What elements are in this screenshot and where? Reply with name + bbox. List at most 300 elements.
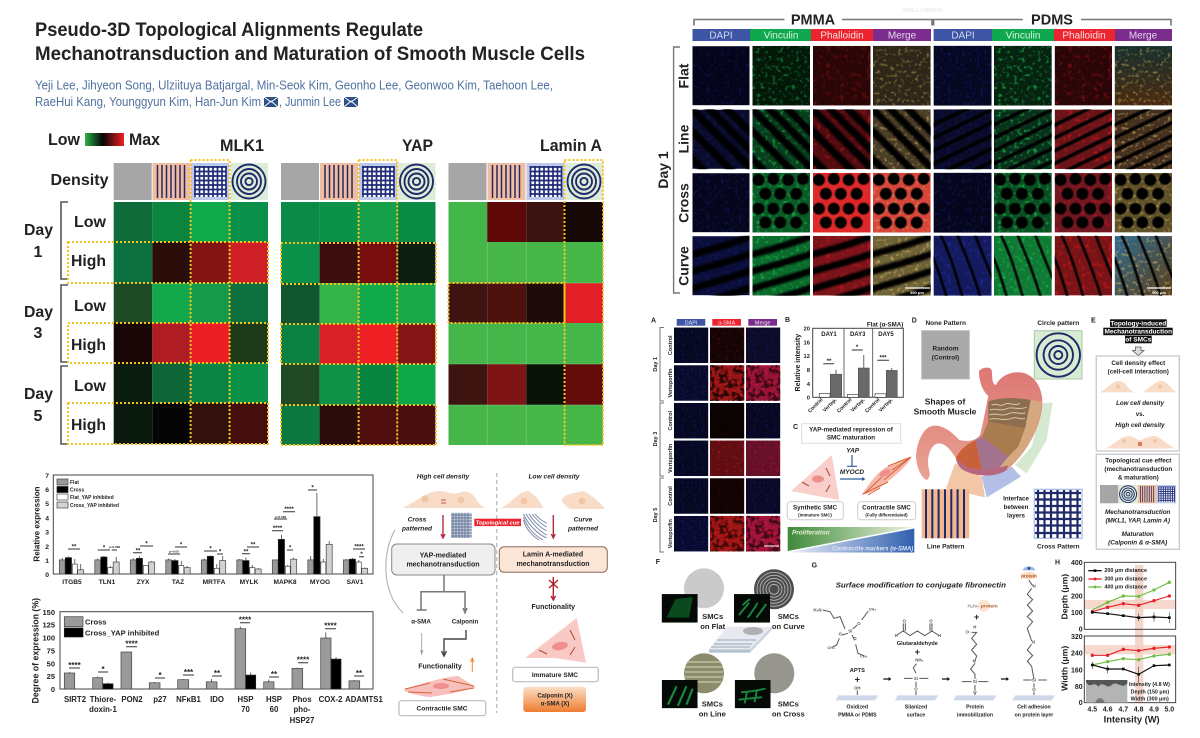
row labels: Low	[74, 214, 107, 231]
step: APTS: O	[853, 636, 857, 641]
box: Lamin A-mediated mechanotransduction: mechanotransduction	[516, 561, 590, 568]
protein labels: SIRT2	[64, 695, 87, 704]
inset caption: Intensity (4.8 W)	[1129, 682, 1170, 688]
gene labels: MYLK	[240, 579, 259, 586]
step: silanized surface: H	[938, 633, 941, 638]
bars: **	[827, 359, 832, 365]
step: APTS: O	[839, 632, 843, 637]
labels: SMCs	[702, 612, 723, 621]
disc: curve	[754, 569, 794, 609]
box: cell density effect	[1096, 356, 1179, 451]
disc: line	[684, 653, 724, 693]
channel headers: Merge	[755, 320, 770, 326]
significance marks: ****	[68, 661, 82, 670]
significance marks: *	[101, 665, 105, 674]
row labels: Day	[24, 304, 53, 321]
black heading: Topology-induced	[1110, 320, 1166, 327]
axis labels: 125	[42, 621, 55, 630]
box: immature SMC: Immature SMC	[532, 672, 578, 679]
significance marks: *	[209, 546, 212, 552]
x labels: Control	[807, 397, 825, 414]
significance marks: p=0.05	[169, 550, 179, 554]
axis labels: 4	[807, 382, 811, 388]
authors: RaeHui Kang, Younggyun Kim, Han-Jun Kim	[35, 95, 261, 109]
icon: contractile cell	[403, 676, 476, 697]
axis labels: 0	[45, 572, 49, 579]
significance marks: ****	[284, 507, 294, 513]
significance marks: ****	[324, 622, 338, 630]
significance marks	[68, 486, 365, 558]
bars	[64, 626, 360, 689]
step: APTS: CH₃	[827, 645, 835, 650]
axis labels: 150	[42, 608, 55, 617]
panel E: topology-induced mechanotransduction	[1091, 317, 1179, 549]
protein labels: pho-	[294, 705, 311, 714]
axis labels: 50	[47, 659, 55, 668]
box: cell density effect: (cell-cell interaction)	[1108, 368, 1169, 375]
significance marks: *	[180, 542, 183, 548]
chart legend: Cross_YAP inhibited	[70, 503, 119, 509]
row labels: Line	[676, 124, 692, 153]
box: topological cue effect	[1096, 454, 1179, 549]
x labels: Vertep.	[878, 397, 895, 414]
protein labels: IDO	[210, 695, 224, 704]
panel B: relative intensity bar chart	[785, 317, 903, 414]
row labels	[24, 172, 109, 434]
box: immature SMC	[513, 667, 598, 682]
panel E: topology-induced mechanotransduction: E	[1091, 317, 1096, 324]
pattern labels: Cross	[408, 516, 427, 524]
panel: Day 1 fluorescence grid: SMCs Patterns	[903, 8, 943, 14]
depth legend	[1088, 568, 1147, 590]
disc: flat	[684, 568, 724, 608]
step: silanized surface: +	[915, 647, 921, 657]
authors: Yeji Lee, Jihyeon Song, Ulziituya Batjargal, Min-Seok Kim, Geonho Lee, Geonwoo Kim, Taehoon Lee,	[35, 78, 553, 92]
axis labels: 75	[47, 646, 55, 656]
panel A: alpha-SMA microscopy: A	[651, 317, 656, 324]
pattern labels: Curve	[574, 516, 593, 524]
axis labels: 8	[807, 368, 811, 374]
panel F: SMCs on patterned substrates: F	[656, 559, 661, 566]
axis labels: 6	[45, 487, 49, 494]
pattern: circle	[1034, 320, 1082, 379]
step: silanized surface: Glutaraldehyde	[897, 641, 938, 647]
depth axis: 400	[1071, 560, 1083, 567]
labels: SMCs	[778, 612, 799, 621]
row labels: Verteporfin	[668, 368, 674, 398]
width axis: 240	[1071, 651, 1083, 658]
row labels: High	[71, 417, 106, 434]
row labels: Verteporfin	[668, 443, 674, 473]
step: APTS: O	[857, 621, 861, 626]
functionality labels: Functionality	[418, 663, 462, 670]
box: contractile SMC: Contractile SMC	[862, 504, 911, 511]
box: contractile SMC: Contractile SMC	[417, 706, 468, 712]
protein labels: ADAMTS1	[345, 695, 384, 704]
box: topological cue effect: Topological cue effect	[1105, 458, 1172, 465]
x labels: Control	[864, 397, 882, 414]
width axis: 160	[1071, 667, 1083, 674]
disc: cross	[754, 653, 794, 693]
gene labels	[62, 579, 364, 586]
title: Mechanotransduction and Maturation of Smooth Muscle Cells	[35, 44, 585, 65]
box: cell density effect: vs.	[1136, 411, 1145, 418]
box: cell density effect: Low cell density	[1116, 400, 1164, 407]
row labels: Day 5	[653, 508, 659, 522]
bars: ***	[879, 356, 887, 362]
step labels: surface	[907, 713, 925, 719]
row labels	[653, 328, 674, 552]
box: calponin / alpha-SMA absent: Calponin (X)	[537, 694, 573, 700]
step: protein immobilization: +	[974, 612, 980, 622]
x labels: Control	[836, 397, 854, 414]
step labels	[838, 705, 1053, 719]
protein labels: Thiore-	[90, 695, 117, 704]
protein labels: Phos	[292, 695, 312, 704]
step: cell adhesion on protein layer	[1021, 566, 1047, 695]
axis labels: 100	[42, 634, 55, 643]
labels: on Curve	[772, 622, 805, 631]
panel C: YAP-mediated repression	[787, 424, 916, 553]
panel A: alpha-SMA microscopy	[651, 317, 780, 552]
row labels: Day 1	[655, 151, 671, 189]
channel headers: DAPI	[685, 320, 698, 326]
box: YAP-mediated mechanotransduction: YAP-mediated	[420, 552, 466, 559]
step: protein immobilization: N	[973, 658, 976, 663]
row labels: Day 3	[653, 432, 659, 446]
box: topological cue effect: (mechanotransduction	[1104, 466, 1172, 473]
brackets and group headings: PMMA	[791, 12, 836, 28]
x axis: Intensity (W)	[1104, 715, 1160, 725]
depth axis: Depth (μm)	[1059, 574, 1069, 620]
bar chart: relative expression	[32, 473, 373, 586]
axis labels	[32, 473, 49, 579]
pattern labels	[401, 516, 599, 532]
panel H: depth and width line charts	[1055, 559, 1176, 725]
x labels: Vertep.	[822, 397, 839, 414]
channel headers: α-SMA	[718, 320, 735, 326]
axis labels: 3	[45, 530, 49, 536]
significance marks: **	[72, 544, 77, 550]
axis labels: 4	[45, 516, 49, 522]
box: Lamin A-mediated mechanotransduction: Lamin A-mediated	[523, 552, 583, 559]
protein labels: PON2	[121, 695, 143, 704]
gene labels: TAZ	[172, 579, 184, 586]
box: YAP-mediated mechanotransduction	[392, 544, 495, 575]
heading: shapes of smooth muscle: Shapes of	[925, 396, 965, 406]
black heading	[1103, 319, 1173, 344]
blocked functionality arrow	[549, 577, 558, 600]
significance marks: *	[219, 550, 222, 556]
axis labels: 25	[47, 672, 55, 681]
microscopy: Line row	[651, 93, 1179, 192]
chart frames and highlights	[1084, 562, 1176, 703]
step: silanized surface: O	[903, 618, 907, 623]
box: topological cue effect: (Calponin & α-SMA)	[1108, 539, 1167, 546]
significance marks: *	[360, 552, 363, 558]
color scale legend: Max	[129, 130, 161, 149]
gene labels: SAV1	[347, 579, 364, 586]
width axis: 320	[1071, 634, 1083, 641]
pathway labels: α-SMA	[411, 618, 431, 625]
box: topological cue effect: & maturation)	[1118, 474, 1159, 481]
patterned plate	[709, 627, 772, 653]
density headings: Low cell density	[529, 474, 580, 481]
inset: flat cells	[662, 594, 698, 623]
row labels: Control	[668, 486, 674, 506]
step: cell adhesion on protein layer: N	[1033, 584, 1036, 589]
axis labels: Relative intensity	[795, 334, 802, 391]
x labels: Vertep.	[850, 397, 867, 414]
panel F: SMCs on patterned substrates	[656, 559, 805, 718]
row labels: Low	[74, 298, 107, 315]
axis labels: 16	[804, 340, 811, 346]
heading box	[802, 424, 901, 443]
chart legend: Cross	[70, 488, 84, 494]
box: calponin / alpha-SMA absent: α-SMA (X)	[541, 701, 569, 707]
axis labels: Degree of expression (%)	[30, 598, 40, 703]
step labels: immobilization	[957, 713, 993, 719]
panel D: shapes of smooth muscle	[912, 317, 1082, 550]
labels: SMCs	[778, 699, 799, 708]
box: Lamin A-mediated mechanotransduction	[499, 547, 607, 572]
row labels: Flat	[676, 63, 692, 88]
depth legend: 300 μm distance	[1104, 576, 1147, 582]
pathway labels	[411, 618, 478, 625]
panel B: relative intensity bar chart: B	[785, 317, 790, 324]
illustration: stomach	[916, 368, 1042, 480]
step labels: Oxidized	[847, 705, 868, 711]
box: cell density effect: Cell density effect	[1111, 360, 1166, 367]
axis labels: 1	[45, 558, 49, 565]
column headings	[220, 136, 602, 155]
gene labels: ZYX	[137, 579, 150, 586]
box: contractile SMC	[858, 502, 916, 520]
title: Pseudo-3D Topological Alignments Regulate	[35, 20, 423, 41]
day brackets	[61, 202, 68, 444]
box: calponin / alpha-SMA absent	[523, 687, 586, 712]
panel D: shapes of smooth muscle: D	[912, 317, 917, 324]
pattern: cross: Cross Pattern	[1037, 543, 1080, 550]
depth legend: 200 μm distance	[1104, 568, 1147, 574]
depth axis: 0	[1079, 627, 1083, 634]
box: cell density effect: High cell density	[1115, 422, 1165, 429]
gene labels: MYOG	[310, 579, 330, 586]
step: protein immobilization: Si	[973, 679, 977, 684]
step: protein immobilization: O	[973, 690, 977, 695]
label: interface between layers	[1003, 496, 1029, 519]
step: APTS: +	[855, 675, 861, 685]
pattern: none: Random	[932, 346, 959, 353]
label: topological cue: Topological cue	[476, 521, 520, 527]
x axis	[1087, 707, 1174, 725]
depth series	[1092, 582, 1169, 623]
title	[35, 20, 585, 65]
panel H: depth and width line charts: H	[1055, 559, 1060, 566]
gene labels: TLN1	[99, 579, 116, 586]
box: contractile SMC	[399, 701, 486, 716]
row labels: Day	[24, 386, 53, 403]
labels: on Flat	[700, 622, 726, 631]
label: interface between layers: layers	[1007, 512, 1025, 519]
significance marks: ****	[354, 544, 364, 550]
proliferation and contractile gradient wedge: Contractile markers (α-SMA)	[832, 547, 913, 553]
inset caption: Depth (150 μm)	[1131, 689, 1169, 695]
icon: contractile cell	[862, 457, 912, 495]
channel headers: DAPI	[709, 30, 733, 42]
pattern: none: None Pattern	[925, 320, 966, 327]
significance marks: *	[311, 486, 314, 492]
step: APTS	[813, 607, 876, 695]
significance marks	[68, 616, 364, 680]
labels: on Line	[699, 709, 726, 718]
box: topological cue effect: Mechanotransduction	[1105, 509, 1171, 516]
chart legend: Flat	[70, 480, 79, 486]
x axis: 5.0	[1164, 707, 1174, 714]
gene labels: MRTFA	[203, 579, 226, 586]
step: silanized surface: NH₂	[915, 658, 924, 663]
pattern: curved lines	[524, 514, 546, 540]
red arrows	[441, 515, 555, 538]
panel G: surface modification chemistry: Surface modification to conjugate fibronectin	[836, 583, 1006, 590]
significance marks: **	[214, 669, 221, 678]
panel: heatmap	[24, 130, 603, 445]
heading box: YAP-mediated repression of	[809, 426, 894, 433]
labels	[699, 612, 805, 718]
bars: *	[856, 345, 859, 351]
scale bars: 500 μm	[1152, 290, 1166, 295]
significance marks: *	[103, 546, 106, 552]
step: silanized surface: H	[895, 633, 898, 638]
step: APTS: Si	[848, 628, 852, 633]
heading: shapes of smooth muscle: Smooth Muscle	[914, 406, 977, 416]
depth axis	[1059, 560, 1083, 634]
panel: Day 1 fluorescence grid	[651, 8, 1179, 307]
x axis: 4.7	[1118, 707, 1128, 714]
width axis: Width (μm)	[1059, 646, 1069, 691]
panel G: surface modification chemistry: G	[812, 562, 817, 569]
day headings	[821, 332, 894, 338]
channel headers: Phalloidin	[1062, 30, 1106, 42]
significance marks: ***	[184, 668, 194, 677]
protein labels: doxin-1	[89, 705, 118, 714]
inset: curve cells	[734, 594, 770, 623]
step: silanized surface: O	[929, 618, 933, 623]
pathway labels: Calponin	[452, 618, 478, 625]
YAP pathway tree	[417, 575, 467, 613]
axis labels: 5	[45, 501, 49, 508]
day headings: DAY1	[821, 332, 837, 338]
proliferation and contractile gradient wedge	[788, 527, 914, 553]
depth legend: 400 μm distance	[1104, 584, 1147, 590]
protein labels: HSP	[237, 695, 254, 704]
microscopy: Curve row	[688, 231, 1176, 307]
heading: shapes of smooth muscle	[914, 396, 977, 416]
step: cell adhesion on protein layer: Si	[1032, 678, 1036, 683]
heading box: SMC maturation	[827, 434, 875, 442]
significance marks: ****	[273, 526, 283, 532]
heatmap: Lamin A	[448, 202, 603, 445]
row labels: Verteporfin	[668, 519, 674, 548]
pattern: line	[922, 489, 969, 550]
day headings: DAY3	[850, 332, 866, 338]
axis labels: 7	[45, 473, 49, 480]
authors: , Junmin Lee	[279, 95, 341, 109]
pattern: cross	[1034, 489, 1082, 550]
axis labels: Relative expression	[32, 486, 42, 562]
column headings: Lamin A	[540, 136, 602, 155]
significance marks: **	[244, 550, 249, 556]
step: APTS: OH	[854, 685, 861, 690]
chart legend	[57, 479, 119, 509]
black heading: Mechanotransduction	[1105, 329, 1172, 336]
box: YAP-mediated mechanotransduction: mechanotransduction	[406, 562, 480, 569]
heatmap: YAP	[281, 202, 436, 445]
box: synthetic SMC: Synthetic SMC	[793, 504, 837, 511]
pattern: cross grid	[451, 513, 472, 538]
bar chart: degree of expression	[30, 598, 384, 725]
labels: on Cross	[772, 709, 805, 718]
step: protein immobilization: O	[966, 630, 970, 635]
row labels: Day	[24, 222, 53, 239]
step: silanized surface	[895, 618, 941, 695]
gene labels: ITGB5	[62, 579, 82, 586]
significance marks: ****	[297, 656, 310, 664]
proliferation and contractile gradient wedge: Proliferation	[792, 530, 830, 536]
row labels: High	[71, 253, 106, 270]
step: silanized surface: Si	[914, 676, 918, 681]
panel C: YAP-mediated repression: C	[793, 424, 798, 431]
yellow dotted highlights	[68, 160, 603, 445]
panel: mechanotransduction schematic	[386, 473, 607, 716]
step: protein immobilization: H₂N– protein	[968, 603, 998, 609]
row labels: Day 1	[653, 357, 659, 372]
chart legend	[64, 617, 160, 638]
orange up arrow	[470, 658, 474, 672]
significance marks: p=0.068	[109, 545, 120, 549]
panel B: relative intensity bar chart: Flat (α-SMA)	[867, 322, 903, 329]
scale bars	[905, 288, 1171, 295]
column headings: YAP	[402, 136, 433, 155]
significance marks: *	[158, 671, 162, 680]
significance marks: p=0.068	[275, 515, 286, 519]
axis labels	[30, 598, 55, 703]
channel headers: Merge	[888, 30, 917, 42]
pattern: none: (Control)	[932, 354, 959, 361]
protein labels: 70	[241, 705, 250, 714]
row labels: Cross	[676, 183, 692, 223]
pattern: none	[922, 320, 969, 379]
x axis: 4.8	[1134, 707, 1144, 714]
protein labels: p27	[153, 695, 167, 704]
density headings	[417, 474, 580, 481]
step labels: Protein	[966, 705, 984, 711]
row labels: 3	[34, 325, 43, 342]
density headings: High cell density	[417, 474, 470, 481]
width axis: 80	[1075, 684, 1083, 691]
x axis: 4.6	[1103, 707, 1113, 714]
x axis: 4.5	[1087, 707, 1097, 714]
row labels	[655, 47, 692, 293]
label: interface between layers: between	[1004, 504, 1029, 511]
day headings: DAY5	[878, 332, 894, 338]
box: topological cue effect: Maturation	[1122, 531, 1154, 538]
x axis: 4.9	[1149, 707, 1159, 714]
gene labels: MAPK8	[273, 579, 297, 586]
width series	[1092, 647, 1169, 683]
pattern labels: patterned	[401, 526, 433, 532]
row labels: Control	[668, 410, 674, 430]
